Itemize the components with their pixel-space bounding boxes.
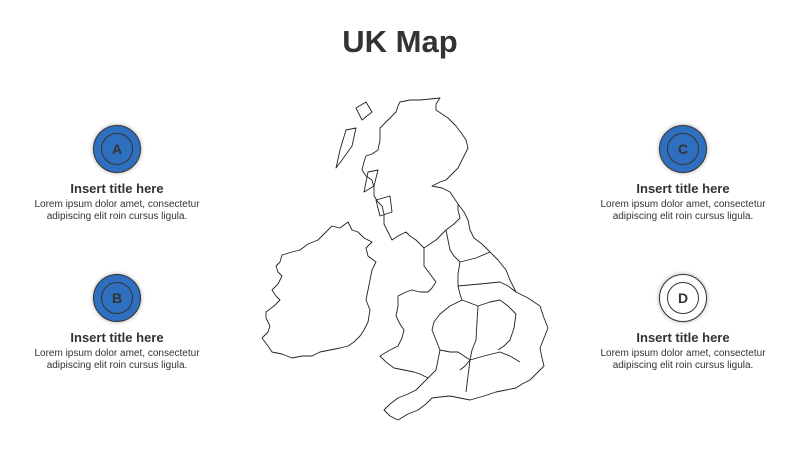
item D: [600, 272, 766, 371]
region borders: [424, 204, 520, 392]
item C: Lorem ipsum dolor amet, consectetur: [600, 199, 766, 210]
item C: [600, 122, 766, 222]
item D: adipiscing elit roin cursus ligula.: [613, 360, 753, 371]
item A: adipiscing elit roin cursus ligula.: [47, 211, 187, 222]
great britain: [362, 98, 548, 420]
item D: Insert title here: [636, 330, 730, 345]
item B: [34, 272, 200, 371]
item B: Lorem ipsum dolor amet, consectetur: [34, 348, 200, 359]
item C: adipiscing elit roin cursus ligula.: [613, 211, 753, 222]
item A: Insert title here: [70, 181, 164, 196]
item A: [34, 122, 200, 222]
ireland: [262, 222, 376, 358]
title: UK Map: [342, 24, 458, 59]
item C: Insert title here: [636, 181, 730, 196]
item A: A: [112, 141, 122, 157]
item D: Lorem ipsum dolor amet, consectetur: [600, 348, 766, 359]
item B: B: [112, 290, 122, 306]
item B: adipiscing elit roin cursus ligula.: [47, 360, 187, 371]
item C: C: [678, 141, 688, 157]
scottish islands: [336, 102, 392, 216]
item A: Lorem ipsum dolor amet, consectetur: [34, 199, 200, 210]
item B: Insert title here: [70, 330, 164, 345]
item D: D: [678, 290, 688, 306]
